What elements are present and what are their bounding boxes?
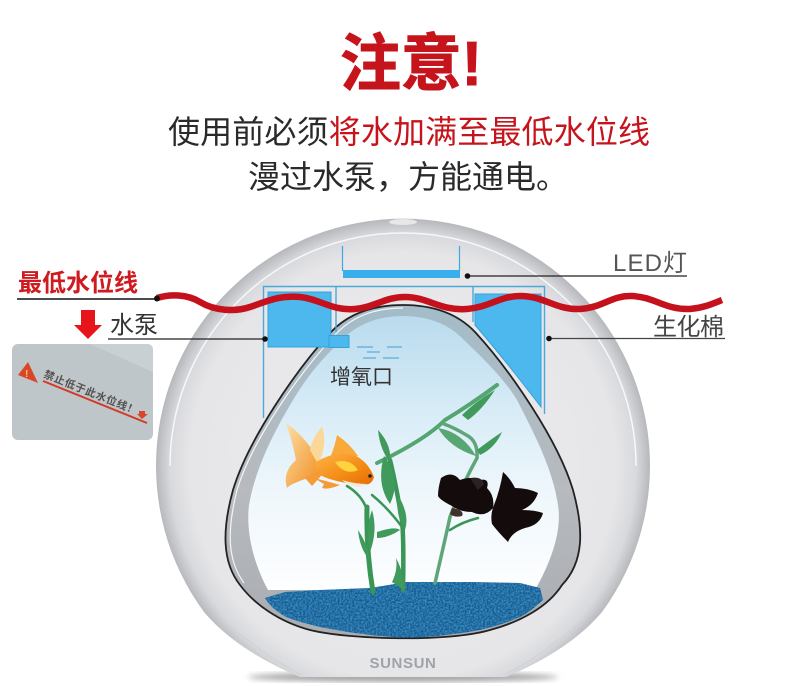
water bbox=[248, 316, 559, 590]
label: water pump bbox=[108, 312, 268, 342]
oxygen bubbles dashes bbox=[357, 347, 402, 358]
down arrow bbox=[74, 310, 102, 339]
aquarium body bbox=[156, 219, 650, 677]
warning triangle icon bbox=[18, 362, 38, 383]
LED lamp diagram bbox=[342, 246, 460, 278]
label: minimum water level bbox=[17, 269, 160, 302]
brand: SUNSUN bbox=[370, 655, 436, 672]
gravel bbox=[265, 582, 543, 638]
plants bbox=[347, 385, 502, 592]
label: oxygen outlet: 增氧口 bbox=[330, 366, 393, 389]
label: LED light: LED灯 bbox=[613, 250, 687, 277]
warning photo: ! bbox=[25, 369, 28, 380]
label: water pump: 水泵 bbox=[110, 312, 158, 339]
aquarium bbox=[156, 219, 650, 677]
warning photo bbox=[12, 344, 153, 440]
label: minimum water level: 最低水位线 bbox=[18, 269, 138, 297]
label: LED light bbox=[465, 250, 687, 279]
instruction text: 使用前必须将水加满至最低水位线 bbox=[168, 114, 650, 150]
top button bbox=[389, 219, 417, 225]
goldfish bbox=[286, 423, 374, 489]
filter sponge block bbox=[475, 294, 541, 407]
warning sticker text: 禁止低于此水位线！ bbox=[42, 368, 139, 417]
internal compartment frame bbox=[264, 286, 544, 418]
instruction text bbox=[168, 114, 650, 195]
tank window bbox=[225, 305, 580, 638]
label: bio sponge bbox=[546, 314, 725, 341]
red minimum water line wave bbox=[157, 295, 722, 310]
ground shadow bbox=[248, 672, 558, 682]
pump block bbox=[268, 292, 349, 348]
instruction text: 漫过水泵，方能通电。 bbox=[248, 159, 568, 195]
label: bio sponge: 生化棉 bbox=[653, 314, 724, 341]
title: 注意! bbox=[340, 30, 482, 99]
black fish bbox=[438, 472, 543, 542]
